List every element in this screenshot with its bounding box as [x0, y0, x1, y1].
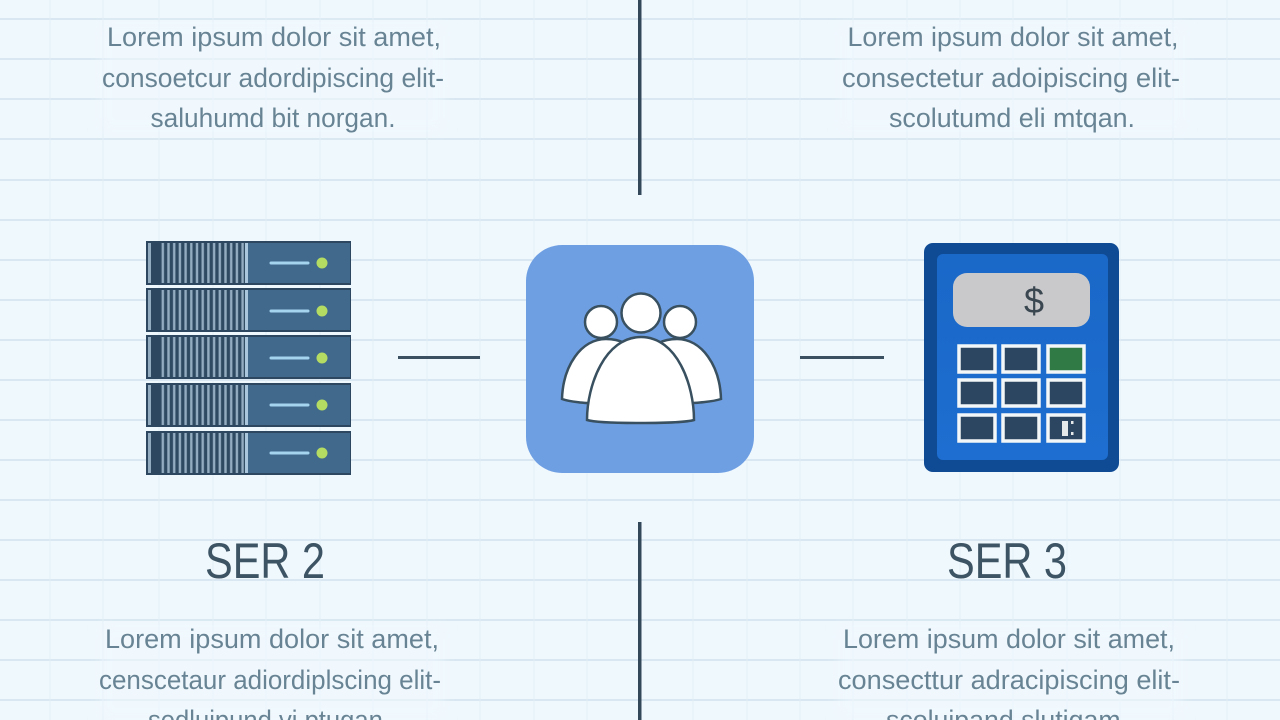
divider: bottom vertical line — [638, 522, 642, 720]
text block: top right description: Lorem ipsum dolor sit amet, — [848, 22, 1178, 52]
server unit 1 — [146, 241, 351, 285]
text block: bottom right description: consecttur adracipiscing elit- — [838, 665, 1180, 695]
connector: right line — [800, 356, 884, 359]
center person — [587, 294, 694, 423]
divider: top vertical line — [638, 0, 642, 195]
text block: top right description: scolutumd eli mtqan. — [889, 103, 1135, 133]
text block: top right description — [840, 22, 1185, 133]
server unit 3 — [146, 335, 351, 379]
text block: top left description — [100, 22, 445, 133]
heading: SER 3: SER 3 — [947, 533, 1067, 589]
server unit 4 — [146, 383, 351, 427]
connector: left line — [398, 356, 480, 359]
server unit 5 — [146, 431, 351, 475]
text block: bottom left description — [99, 624, 445, 720]
server unit 2 — [146, 288, 351, 332]
calculator display — [953, 273, 1090, 327]
calculator display: $ — [1024, 280, 1044, 321]
heading: SER 2: SER 2 — [205, 533, 325, 589]
icon: calculator — [924, 243, 1119, 472]
text block: bottom right description — [838, 624, 1183, 720]
text block: bottom right description: Lorem ipsum dolor sit amet, — [843, 624, 1175, 654]
icon: people group tile — [526, 245, 754, 473]
text block: top left description: Lorem ipsum dolor sit amet, — [107, 22, 441, 52]
text block: top left description: saluhumd bit norgan. — [150, 103, 396, 133]
text block: top left description: consoetcur adordipiscing elit- — [102, 63, 444, 93]
icon: server rack — [146, 241, 351, 475]
text block: bottom left description: Lorem ipsum dolor sit amet, — [105, 624, 439, 654]
right person — [643, 306, 721, 404]
text block: bottom left description: censcetaur adiordiplscing elit- — [99, 665, 441, 695]
calculator keys — [959, 346, 1084, 441]
text block: top right description: consectetur adoipiscing elit- — [842, 63, 1180, 93]
left person — [562, 306, 640, 404]
